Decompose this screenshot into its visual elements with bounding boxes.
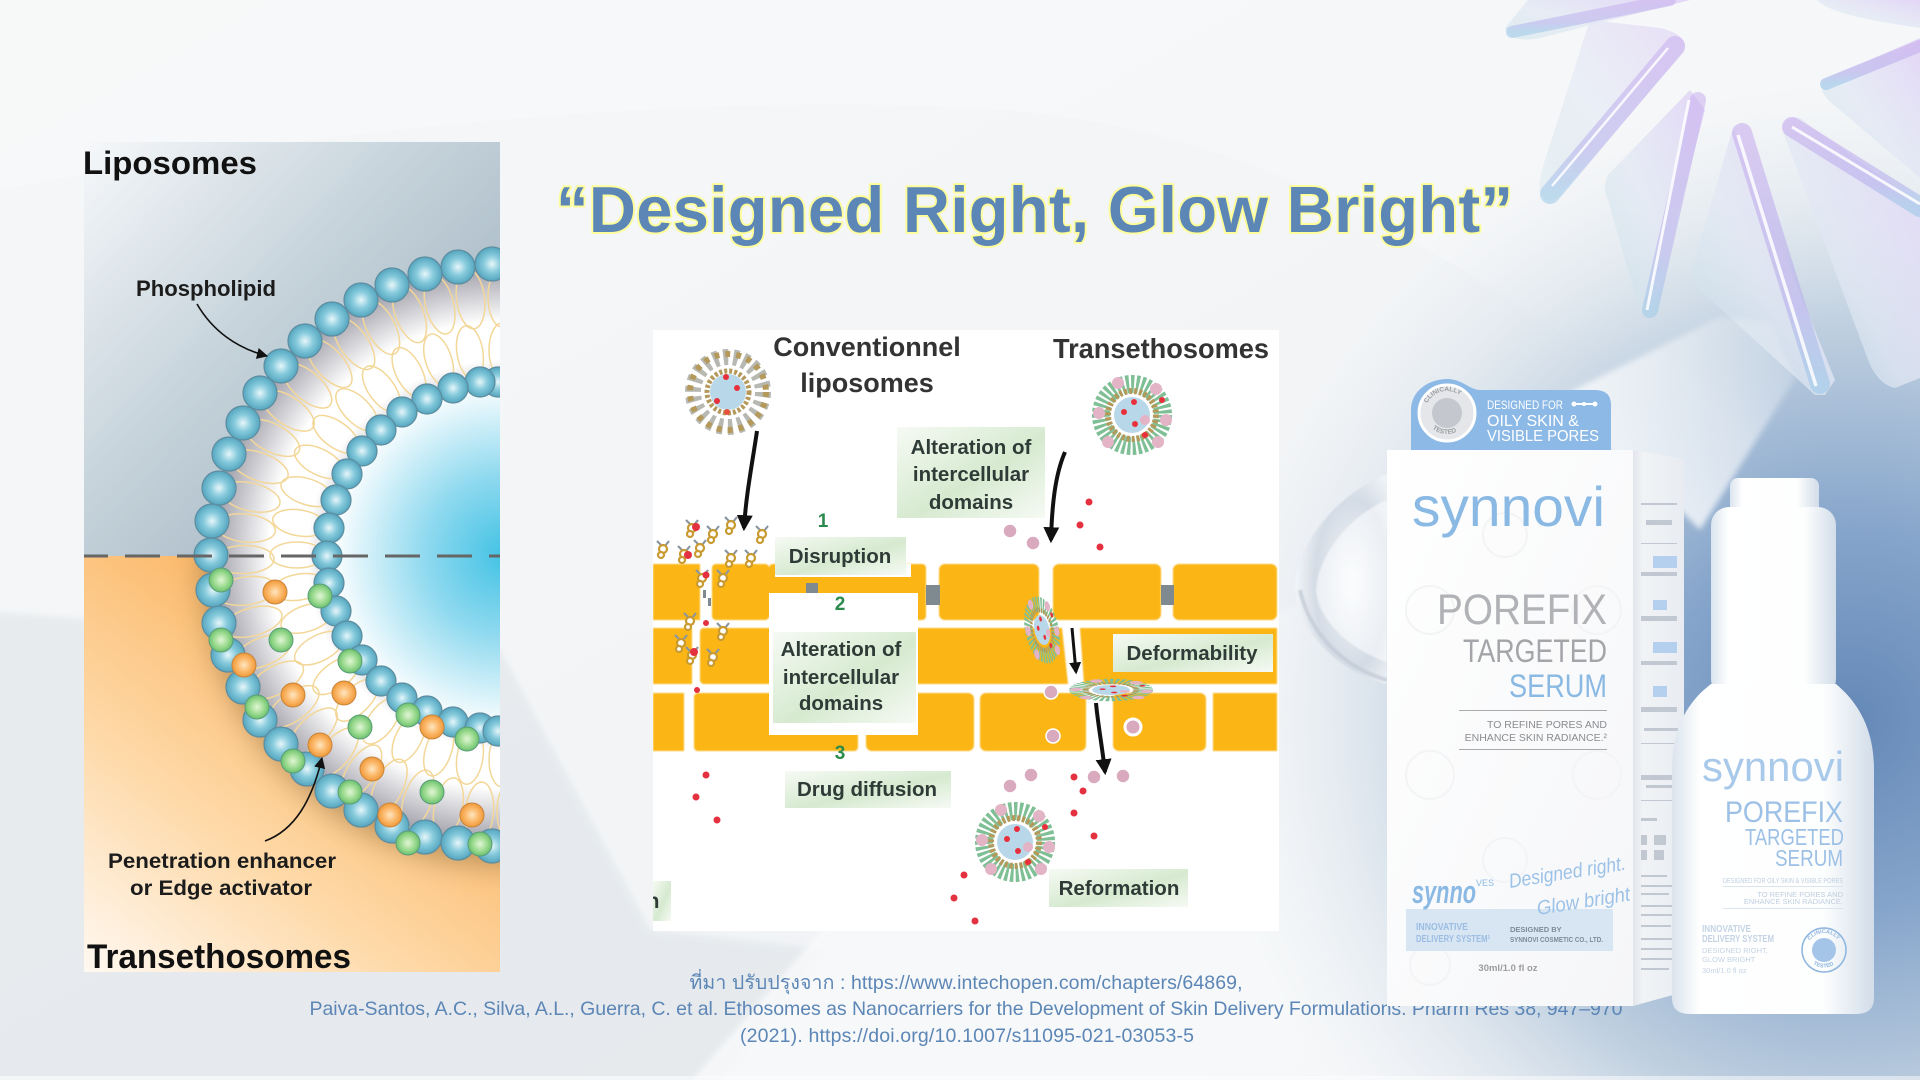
box product name: TARGETED: [1463, 633, 1607, 669]
step numbers: 1: [818, 511, 829, 532]
source citation: Paiva-Santos, A.C., Silva, A.L., Guerra, C. et al. Ethosomes as Nanocarriers for the Development of Skin Delivery Formulations. Pharm Res 38, 947–970: [310, 998, 1623, 1020]
heading: transethosomes: Transethosomes: [1053, 333, 1269, 364]
box delivery system strip: SYNNOVI COSMETIC CO., LTD.: [1510, 935, 1603, 944]
box delivery system strip: DELIVERY SYSTEM¹: [1416, 934, 1491, 945]
arrow: exit from skin: [1096, 703, 1105, 772]
step numbers: 2: [835, 594, 845, 615]
label: deformability: [1113, 634, 1273, 672]
box side panel: [1633, 450, 1684, 1006]
orange penetration enhancers: [232, 580, 484, 827]
conventional liposome: [690, 354, 766, 430]
label: reformation: [1049, 869, 1188, 907]
label: reformation: Reformation: [1059, 877, 1179, 900]
source citation: [310, 969, 1623, 1047]
bottle clinically tested badge: CLINICALLY: [1808, 929, 1840, 940]
box tag: TESTED: [1434, 425, 1456, 434]
step numbers: 3: [835, 743, 845, 764]
box tag: DESIGNED FOR: [1487, 398, 1563, 412]
label: deformability: Deformability: [1126, 642, 1258, 665]
crystal petals decoration: [1505, 0, 1920, 395]
bottle delivery system: [1702, 923, 1774, 975]
label: drug diffusion: Drug diffusion: [797, 778, 937, 801]
transethosome: [1093, 377, 1172, 448]
box front: [1387, 450, 1633, 1006]
bottle delivery system: GLOW BRIGHT: [1702, 955, 1756, 964]
label: cropped corner: n: [647, 890, 659, 913]
panel: liposomes vs transethosomes diagram: Penetration enhancer: [108, 850, 336, 873]
box logo: synnovi: [1412, 475, 1605, 538]
box delivery system strip: INNOVATIVE: [1416, 922, 1468, 933]
heading: conventional liposomes: liposomes: [800, 368, 934, 398]
green edge activators: [209, 568, 492, 856]
arrow: liposome to skin: [744, 431, 757, 528]
box claim: ENHANCE SKIN RADIANCE.²: [1465, 732, 1607, 744]
panel: liposomes vs transethosomes diagram: Phospholipid: [136, 276, 276, 301]
box claim: [1459, 710, 1607, 750]
panel: liposomes vs transethosomes diagram: [84, 142, 500, 972]
box delivery system strip: 30ml/1.0 fl oz: [1478, 963, 1538, 974]
label: disruption: [775, 537, 906, 575]
box product name: SERUM: [1509, 668, 1607, 704]
label: alteration middle: [773, 632, 916, 723]
gel droplet: [1295, 474, 1387, 684]
arrow: deformation: [1072, 628, 1076, 672]
heading: conventional liposomes: Conventionnel: [773, 332, 961, 362]
panel: liposomes vs transethosomes diagram: or Edge activator: [130, 877, 312, 900]
reformed transethosome: [976, 804, 1055, 875]
label: alteration top: intercellular: [913, 463, 1029, 486]
source citation: (2021). https://doi.org/10.1007/s11095-021-03053-5: [740, 1025, 1194, 1047]
label: alteration top: Alteration of: [911, 436, 1032, 459]
panel: liposomes vs transethosomes diagram: Liposomes: [83, 145, 257, 181]
edge activator vesicles: [1003, 524, 1141, 793]
label: cropped corner: [653, 881, 671, 921]
box tag: VISIBLE PORES: [1487, 428, 1599, 445]
step numbers: [818, 511, 845, 764]
box delivery system strip: [1406, 853, 1633, 974]
bottle logo: synnovi: [1702, 743, 1844, 790]
bottle delivery system: DESIGNED RIGHT,: [1702, 946, 1768, 955]
bottle claim: [1723, 876, 1844, 909]
product box: [1387, 379, 1684, 1006]
disrupted lipid fragments: [657, 517, 768, 666]
drug molecules: [692, 498, 1104, 924]
bottle product name: SERUM: [1775, 845, 1843, 871]
title: “Designed Right, Glow Bright”: [556, 173, 1513, 246]
panel: skin penetration mechanism diagram: [647, 330, 1279, 931]
arrow: transethosome to skin: [1051, 452, 1065, 540]
bottle delivery system: 30ml/1.0 fl oz: [1702, 966, 1747, 975]
bottle claim: DESIGNED FOR OILY SKIN & VISIBLE PORES: [1723, 876, 1843, 885]
deformed transethosome in gap: [1024, 596, 1060, 664]
bottle clinically tested badge: [1801, 927, 1847, 973]
bottle delivery system: DELIVERY SYSTEM: [1702, 933, 1774, 945]
box product name: [1437, 586, 1607, 704]
box product name: POREFIX: [1437, 586, 1607, 634]
outer phospholipid ring: [194, 247, 513, 863]
bottle product name: [1725, 796, 1844, 871]
box delivery system strip: VES: [1476, 878, 1494, 888]
box delivery system strip: Glow bright: [1535, 883, 1633, 920]
bottle delivery system: INNOVATIVE: [1702, 923, 1751, 935]
label: alteration middle: domains: [799, 692, 883, 715]
label: alteration middle: Alteration of: [781, 638, 902, 661]
box tag: [1411, 379, 1611, 450]
box delivery system strip: Designed right.: [1507, 853, 1627, 893]
box delivery system strip: synno: [1412, 874, 1476, 910]
label: drug diffusion: [785, 771, 951, 808]
product bottle: [1672, 478, 1874, 1014]
bottle clinically tested badge: TESTED: [1814, 960, 1834, 968]
box tag: OILY SKIN &: [1487, 413, 1580, 430]
box claim: TO REFINE PORES AND: [1487, 719, 1607, 731]
panel: liposomes vs transethosomes diagram: Transethosomes: [87, 938, 351, 976]
bottle product name: TARGETED: [1745, 824, 1844, 850]
box delivery system strip: DESIGNED BY: [1510, 925, 1562, 934]
bottle claim: TO REFINE PORES AND: [1757, 890, 1844, 899]
label: disruption: Disruption: [789, 545, 891, 568]
flattened transethosome: [1070, 679, 1153, 699]
label: alteration top: [897, 427, 1045, 518]
stratum corneum cells: [653, 564, 1277, 751]
label: alteration middle: intercellular: [783, 666, 899, 689]
bottle claim: ENHANCE SKIN RADIANCE.: [1744, 897, 1843, 906]
cream swoosh: [1570, 317, 1795, 530]
source citation: ที่มา ปรับปรุงจาก : https://www.intechopen.com/chapters/64869,: [690, 969, 1242, 995]
bottle product name: POREFIX: [1725, 796, 1843, 829]
box tag: CLINICALLY: [1424, 386, 1462, 402]
label: alteration top: domains: [929, 491, 1013, 514]
